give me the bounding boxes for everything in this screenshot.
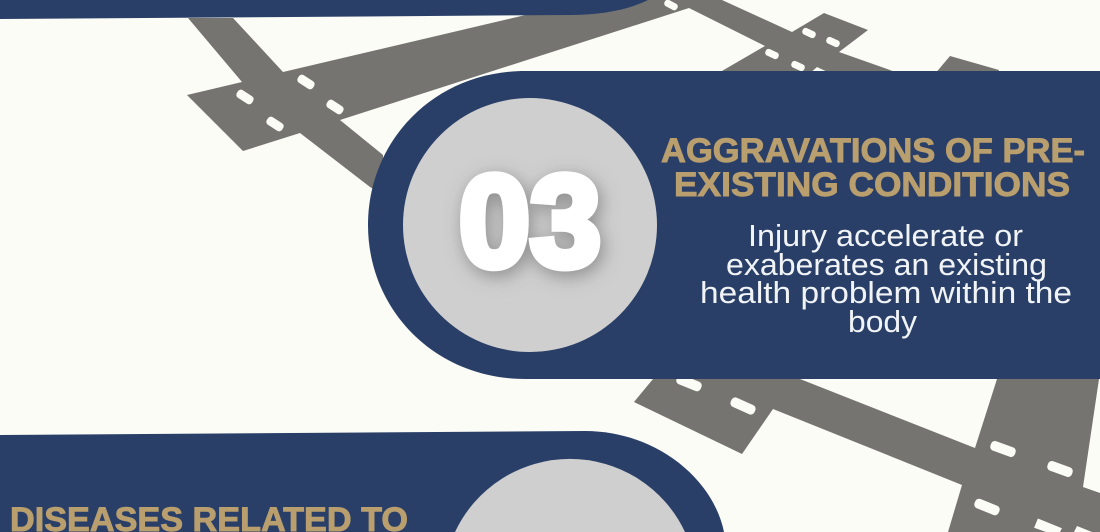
road: lower right crossing xyxy=(634,373,1100,532)
description: body xyxy=(848,304,918,339)
heading: AGGRAVATIONS OF PRE- xyxy=(661,132,1085,170)
panel: diseases related to (cropped) xyxy=(0,431,724,532)
description: health problem within the xyxy=(700,275,1072,310)
number 03: 03 xyxy=(459,148,601,294)
number badge circle xyxy=(455,459,685,532)
panel: 03 aggravations of pre-existing conditions xyxy=(368,71,1100,379)
description: exaberates an existing xyxy=(726,247,1047,282)
road: upper right fragment xyxy=(934,56,999,75)
road: upper left crossing xyxy=(187,0,904,195)
heading xyxy=(661,132,1085,204)
heading: EXISTING CONDITIONS xyxy=(674,166,1070,204)
number badge circle xyxy=(403,98,657,352)
panel: top banner (cropped) xyxy=(0,0,648,19)
description xyxy=(700,218,1072,339)
description: Injury accelerate or xyxy=(748,218,1023,253)
